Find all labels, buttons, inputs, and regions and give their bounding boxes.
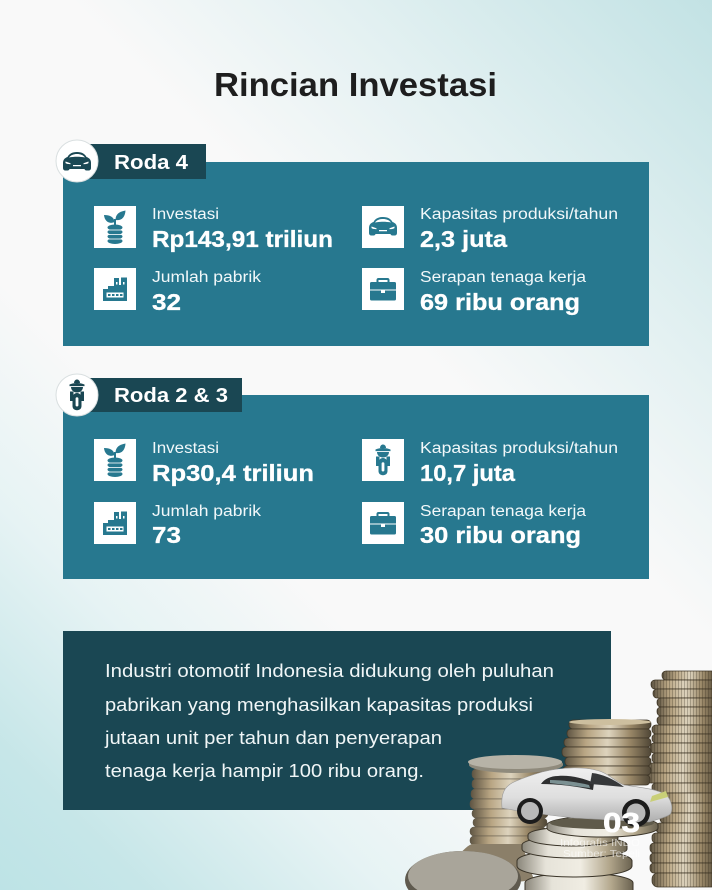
stat: jumlah pabrik: Jumlah pabrik bbox=[152, 269, 261, 286]
stat: serapan tenaga kerja bbox=[362, 268, 586, 315]
stat: serapan tenaga kerja: 69 ribu orang bbox=[420, 289, 580, 315]
panel: summary text: pabrikan yang menghasilkan kapasitas produksi bbox=[105, 695, 533, 715]
stat: kapasitas produksi bbox=[362, 439, 618, 486]
section tab: Roda 4 bbox=[56, 140, 206, 182]
stat: kapasitas produksi: Kapasitas produksi/tahun bbox=[420, 440, 618, 457]
coin: bottom left flat bbox=[405, 844, 534, 890]
coin stack: back right bbox=[647, 671, 712, 887]
section tab: Roda 2 & 3 bbox=[56, 374, 242, 416]
coin stack: back middle bbox=[562, 719, 651, 785]
stat: kapasitas produksi: 10,7 juta bbox=[420, 460, 515, 486]
section tab: Roda 4: Roda 4 bbox=[114, 151, 189, 174]
source note bbox=[560, 838, 640, 860]
stat: jumlah pabrik: Jumlah pabrik bbox=[152, 503, 261, 520]
title: Rincian Investasi bbox=[214, 66, 497, 103]
panel: summary text: jutaan unit per tahun dan penyerapan bbox=[104, 728, 442, 748]
stat: jumlah pabrik bbox=[94, 268, 261, 315]
source note: Sumber: Tepeli bbox=[563, 849, 640, 860]
stat: kapasitas produksi: Kapasitas produksi/tahun bbox=[420, 206, 618, 223]
toy car bbox=[502, 768, 672, 827]
section tab: Roda 2 & 3: Roda 2 & 3 bbox=[114, 384, 228, 407]
coin stack: front bbox=[517, 816, 658, 890]
stat: investasi: Rp30,4 triliun bbox=[152, 460, 314, 486]
stat: serapan tenaga kerja bbox=[362, 502, 586, 548]
stat: serapan tenaga kerja: Serapan tenaga kerja bbox=[420, 503, 586, 520]
panel: Roda 4 bbox=[56, 140, 649, 346]
stat: investasi bbox=[94, 206, 333, 252]
page number: 03 bbox=[603, 807, 640, 838]
stat: serapan tenaga kerja: Serapan tenaga kerja bbox=[420, 269, 586, 286]
stat: kapasitas produksi: 2,3 juta bbox=[420, 226, 507, 252]
stat: jumlah pabrik: 32 bbox=[152, 289, 181, 315]
stat: investasi bbox=[94, 439, 314, 486]
stat: kapasitas produksi bbox=[362, 206, 618, 252]
stat: serapan tenaga kerja: 30 ribu orang bbox=[420, 522, 581, 548]
stat: investasi: Rp143,91 triliun bbox=[152, 226, 333, 252]
stat: investasi: Investasi bbox=[152, 206, 219, 223]
stat: jumlah pabrik: 73 bbox=[152, 522, 181, 548]
stat: investasi: Investasi bbox=[152, 440, 219, 457]
stat: jumlah pabrik bbox=[94, 502, 261, 548]
panel: summary text: Industri otomotif Indonesia didukung oleh puluhan bbox=[105, 661, 554, 681]
panel: summary text: tenaga kerja hampir 100 ribu orang. bbox=[105, 761, 424, 781]
illustration: coin stacks with toy car bbox=[405, 671, 712, 890]
panel: Roda 2 & 3 bbox=[56, 374, 649, 579]
coin stack: left bbox=[468, 755, 563, 845]
source note: Infografis INDO bbox=[560, 838, 640, 849]
panel: summary text bbox=[63, 631, 611, 810]
